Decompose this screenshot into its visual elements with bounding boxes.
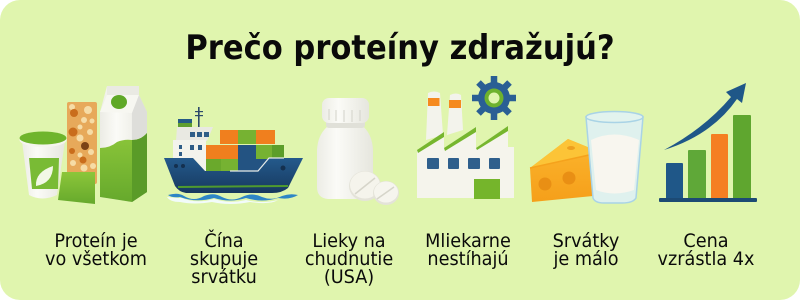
label: Cena vzrástla 4x: vzrástla 4x (658, 248, 755, 270)
gear (472, 76, 516, 120)
tablets (349, 171, 399, 205)
icon: pill bottle with tablets (317, 98, 399, 205)
arrow (664, 83, 746, 150)
icon: factory with gear (417, 76, 516, 199)
yogurt cup (20, 132, 66, 198)
icon: yogurt, protein bar and milk carton (20, 86, 147, 204)
label: Proteín je vo všetkom: Proteín je (54, 230, 138, 252)
label: Čína skupuje srvátku: Čína (204, 229, 244, 252)
label: Lieky na chudnutie (USA): (USA) (324, 266, 374, 288)
label: Čína skupuje srvátku: skupuje (190, 248, 258, 270)
label: Srvátky je málo: Srvátky (553, 230, 619, 252)
icon: cheese and glass of milk (530, 112, 643, 203)
bars (659, 115, 757, 202)
label: Mliekarne nestíhajú: nestíhajú (427, 248, 509, 270)
label: Čína skupuje srvátku: srvátku (191, 266, 257, 288)
cheese (530, 139, 593, 202)
label: Proteín je vo všetkom: vo všetkom (45, 248, 147, 270)
milk carton (100, 86, 147, 202)
containers (206, 130, 284, 172)
hull (164, 158, 303, 193)
icon: rising bar chart with arrow (659, 83, 757, 202)
label: Mliekarne nestíhajú: Mliekarne (425, 230, 511, 252)
ship superstructure (173, 107, 213, 172)
label: Lieky na chudnutie (USA): Lieky na (312, 230, 386, 252)
label: Cena vzrástla 4x: Cena (683, 230, 729, 252)
building (417, 126, 514, 198)
protein bar (58, 102, 97, 204)
glass with milk (586, 112, 643, 203)
label: Srvátky je málo: je málo (552, 248, 619, 270)
title: Prečo proteíny zdražujú? (185, 27, 615, 67)
chimneys (426, 92, 443, 140)
label: Lieky na chudnutie (USA): chudnutie (305, 248, 393, 270)
waves (168, 194, 298, 200)
icon: container ship (164, 107, 303, 204)
